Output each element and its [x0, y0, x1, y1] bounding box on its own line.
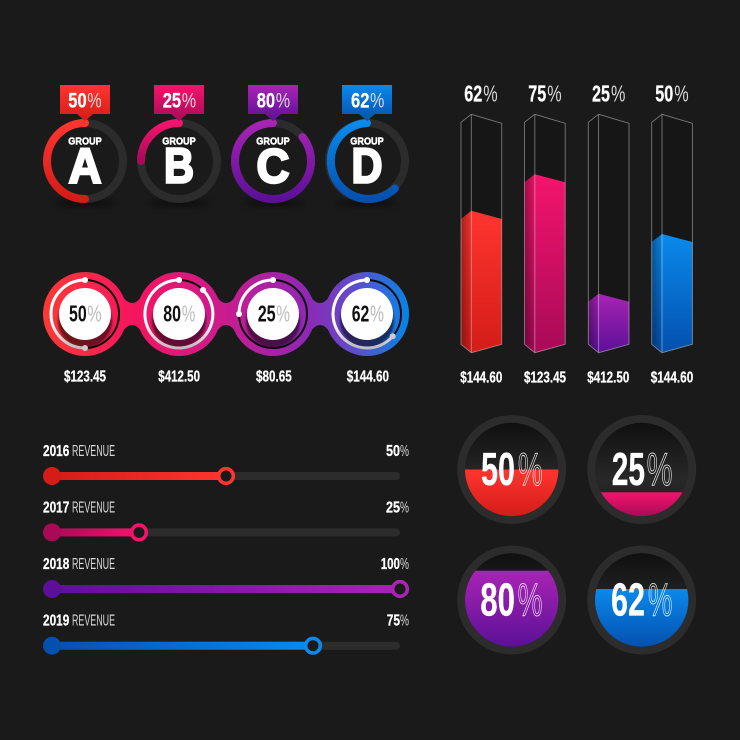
bar 25% purple: % — [611, 81, 625, 107]
group D ring: % — [370, 89, 384, 112]
linked gradient band — [43, 272, 409, 356]
slider 2019: REVENUE — [72, 612, 115, 630]
price labels: $123.45 — [64, 369, 106, 386]
slider 2016: 2016 — [43, 443, 69, 460]
bar 62% red — [460, 81, 502, 387]
group C ring: GROUP — [256, 136, 290, 147]
group A ring — [47, 85, 123, 206]
price labels: $144.60 — [347, 369, 389, 386]
slider 2018: 2018 — [43, 556, 69, 573]
bar 25% purple: $412.50 — [587, 370, 629, 387]
circle 25%: % — [276, 301, 290, 327]
gauge 25%: 25 — [612, 443, 645, 495]
slider 2018: REVENUE — [72, 556, 115, 573]
panel: revenue sliders — [43, 443, 409, 655]
bar 62% red: 62 — [464, 81, 482, 107]
slider 2017: 2017 — [43, 500, 69, 516]
panel: linked percentage circles — [43, 272, 409, 386]
slider 2016 — [43, 443, 409, 485]
group A ring: GROUP — [68, 136, 102, 147]
group B ring — [141, 85, 217, 206]
circle 50%: 50 — [69, 301, 87, 327]
slider 2016: 50 — [386, 443, 400, 460]
panel: group rings — [47, 85, 405, 206]
group D ring: D — [352, 140, 382, 194]
bar 25% purple — [587, 81, 629, 387]
slider 2018 — [43, 556, 409, 598]
group B ring: % — [182, 89, 196, 112]
circle 80% — [145, 277, 213, 348]
bar 75% pink — [524, 81, 566, 387]
group C ring — [235, 85, 311, 206]
gauge 80%: % — [518, 574, 542, 626]
slider 2019: 75 — [387, 612, 400, 630]
slider 2016: % — [400, 443, 409, 460]
bar 62% red: $144.60 — [460, 370, 502, 387]
circle 50% — [51, 277, 119, 351]
gauge 50%: % — [518, 443, 542, 495]
gauge 50%: 50 — [481, 443, 515, 495]
slider 2017: 25 — [386, 500, 400, 516]
slider 2019: 2019 — [43, 612, 69, 630]
circle 25% — [236, 277, 307, 348]
slider 2017: REVENUE — [72, 500, 115, 516]
circle 80%: 80 — [163, 301, 181, 327]
bar 50% blue: $144.60 — [651, 370, 693, 387]
bar 50% blue: % — [674, 81, 689, 107]
gauge 62%: 62 — [611, 574, 645, 626]
slider 2017: % — [400, 500, 409, 516]
group D ring — [329, 85, 405, 206]
slider 2019 — [43, 612, 409, 655]
gauge 50% — [457, 415, 566, 524]
circle 62% — [333, 277, 401, 348]
group A ring: % — [87, 89, 102, 112]
bar 75% pink: 75 — [528, 81, 546, 107]
group A ring: A — [68, 140, 102, 194]
slider 2018: % — [400, 556, 409, 573]
circle 62%: 62 — [352, 301, 369, 327]
group C ring: % — [276, 89, 290, 112]
slider 2017 — [43, 500, 409, 541]
group D ring: GROUP — [350, 136, 384, 147]
bar 75% pink: % — [547, 81, 562, 107]
panel: fill gauges — [457, 415, 696, 654]
bar 50% blue — [651, 81, 693, 387]
bar 25% purple: 25 — [592, 81, 610, 107]
price labels: $80.65 — [256, 369, 292, 386]
group A ring: 50 — [68, 89, 87, 112]
gauge 80%: 80 — [480, 574, 515, 626]
gauge 25%: % — [647, 443, 672, 495]
gauge 62%: % — [648, 574, 672, 626]
gauge 25% — [587, 415, 696, 524]
slider 2019: % — [400, 612, 409, 630]
group B ring: 25 — [163, 89, 181, 112]
gauge 80% — [457, 546, 566, 654]
bar 75% pink: $123.45 — [524, 370, 566, 387]
slider 2016: REVENUE — [72, 443, 115, 460]
circle 62%: % — [370, 301, 384, 327]
price labels — [64, 369, 389, 386]
group B ring: GROUP — [162, 136, 196, 147]
circle 80%: % — [182, 301, 195, 327]
gauge 62% — [587, 546, 696, 654]
slider 2018: 100 — [381, 556, 400, 573]
price labels: $412.50 — [158, 369, 200, 386]
panel: 3D bar chart — [460, 81, 693, 387]
group D ring: 62 — [351, 89, 369, 112]
group C ring: 80 — [257, 89, 275, 112]
circle 25%: 25 — [258, 301, 276, 327]
circle 50%: % — [87, 301, 102, 327]
group B ring: B — [164, 140, 194, 194]
group C ring: C — [256, 140, 290, 193]
bar 50% blue: 50 — [655, 81, 673, 107]
bar 62% red: % — [483, 81, 498, 107]
